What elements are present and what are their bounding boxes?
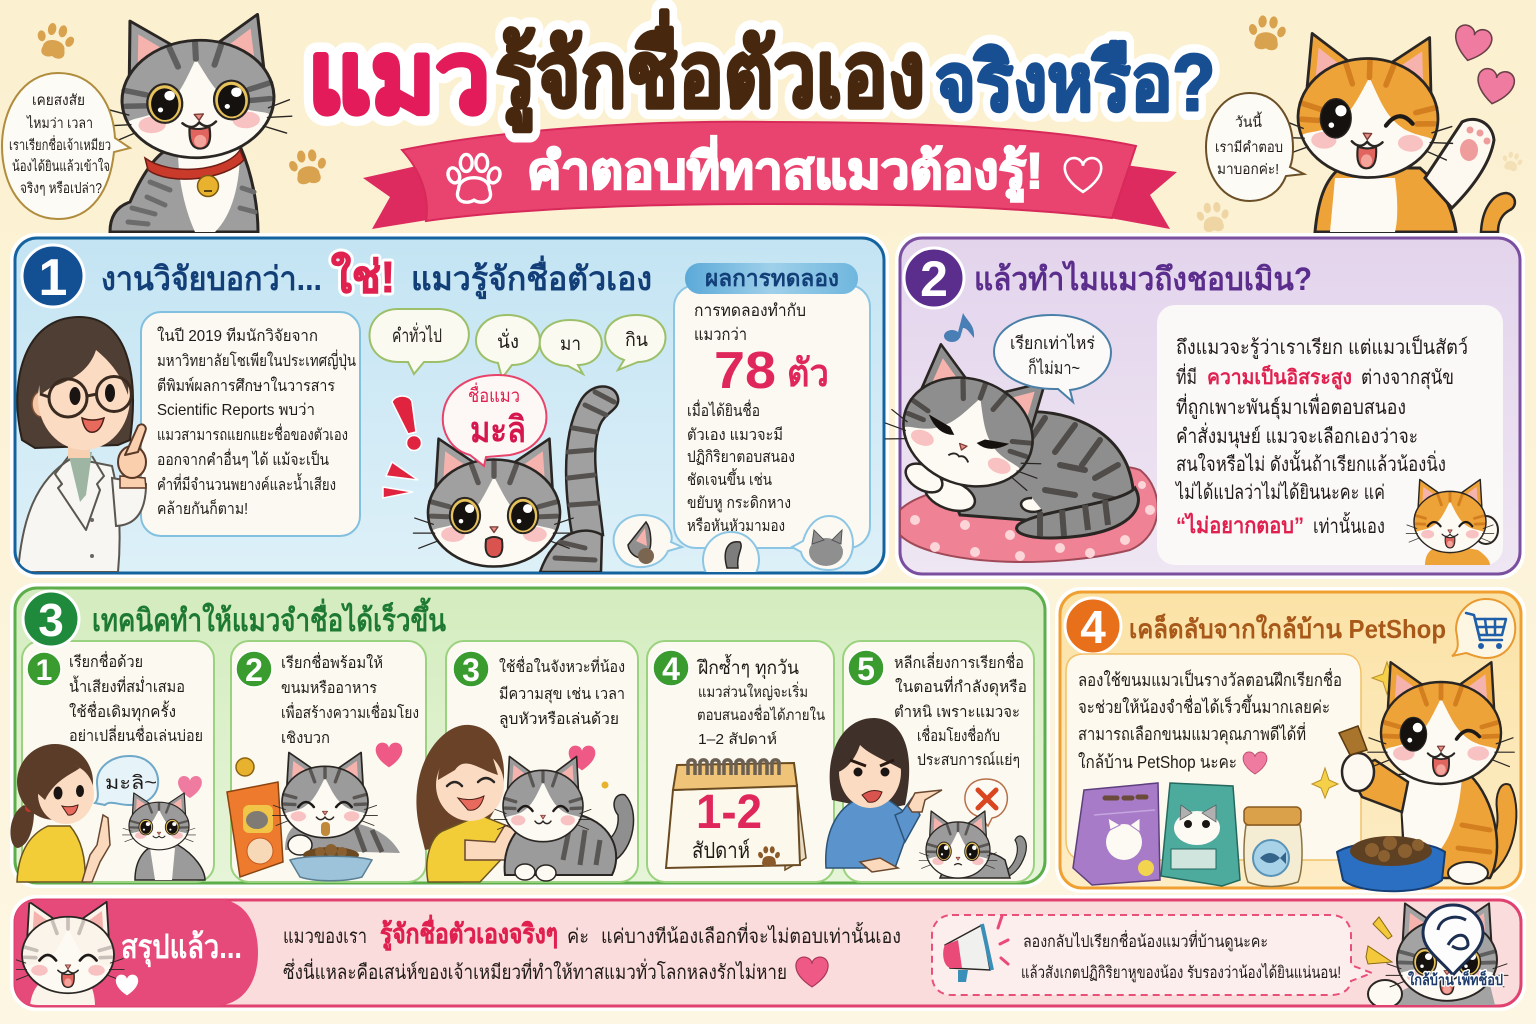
technique 4 card: 1–2 สัปดาห์ <box>698 731 777 748</box>
decorative paw prints <box>32 14 1525 233</box>
cat eating <box>273 752 400 855</box>
summary text: ซึ่งนี่แหละคือเสน่ห์ของเจ้าเหมียวที่ทำให้ทาสแมวทั่วโลกหลงรักไม่หาย <box>283 958 787 984</box>
logo pin: ใกล้บ้าน เพ็ทช็อป <box>1408 970 1503 989</box>
panel 1 heading: แมวรู้จักชื่อตัวเอง <box>411 255 652 300</box>
experiment results card: ชัดเจนขึ้น เช่น <box>687 468 772 489</box>
panel 1: research <box>10 233 889 588</box>
panel 4 number badge: 4 <box>1080 601 1106 653</box>
reaction icons <box>612 514 854 572</box>
technique 2 card <box>227 641 426 882</box>
word bubbles: กิน <box>625 330 648 351</box>
panel 4 number badge <box>1065 598 1121 654</box>
experiment results card: ตัวเอง แมวจะมี <box>687 426 783 444</box>
callout with megaphone: แล้วสังเกตปฏิกิริยาหูของน้อง รับรองว่าน้องได้ยินแน่นอน! <box>1021 963 1341 983</box>
technique 3 card: 3 <box>462 652 480 688</box>
panel 2 body text card: ต่างจากสุนัข <box>1361 367 1454 390</box>
icon: shopping cart bubble <box>1452 599 1515 658</box>
panel 1 heading: งานวิจัยบอกว่า... <box>101 260 322 297</box>
panel 2 body text card: “ไม่อยากตอบ” <box>1176 512 1304 538</box>
speech bubble: sleepy cat: ก็ไม่มา~ <box>1028 357 1080 378</box>
panel 4 body text card <box>1066 654 1361 860</box>
speech bubble: sleepy cat <box>994 315 1111 402</box>
speech bubble: right cat <box>1206 93 1304 201</box>
food bowl <box>290 844 372 881</box>
technique 5 card: ตำหนิ เพราะแมวจะ <box>894 704 1020 721</box>
surprised cat <box>413 439 602 572</box>
logo pin <box>1408 905 1503 989</box>
technique 4 card <box>647 641 834 882</box>
panel 2 heading: แล้วทำไมแมวถึงชอบเมิน? <box>974 260 1312 297</box>
panel 1 body text card: ตีพิมพ์ผลการศึกษาในวารสาร <box>157 376 335 395</box>
title: จริงหรือ? <box>935 38 1215 127</box>
technique 1 card: น้ำเสียงที่สม่ำเสมอ <box>69 675 185 696</box>
technique 5 card <box>826 641 1034 882</box>
cat name bubble <box>443 375 546 466</box>
panel 1 body text card: Scientific Reports พบว่า <box>157 402 315 419</box>
technique 2 card: ขนมหรืออาหาร <box>281 679 377 697</box>
title: แมว <box>308 22 490 134</box>
technique 4 card: ตอบสนองชื่อได้ภายใน <box>697 704 825 724</box>
speech bubble: sleepy cat: เรียกเท่าไหร่ <box>1010 333 1095 353</box>
grey cat bottom right <box>1368 903 1508 1008</box>
banner ribbon <box>363 122 1177 229</box>
panel 2 body text card: ความเป็นอิสระสูง <box>1207 364 1352 391</box>
coin and heart <box>236 743 402 776</box>
panel 4 body text card: จะช่วยให้น้องจำชื่อได้เร็วขึ้นมากเลยค่ะ <box>1078 694 1330 717</box>
panel 1 body text card: มหาวิทยาลัยโชเพียในประเทศญี่ปุ่น <box>157 349 356 371</box>
technique 5 card: หลีกเลี่ยงการเรียกชื่อ <box>894 652 1024 672</box>
panel 4 body text card: ใกล้บ้าน PetShop นะคะ <box>1078 752 1237 772</box>
title <box>308 9 1215 134</box>
panel 3: techniques <box>10 583 1050 888</box>
experiment results card: แมวกว่า <box>694 325 747 344</box>
technique 3 card: ลูบหัวหรือเล่นด้วย <box>499 710 619 729</box>
panel 3 number badge: 3 <box>38 594 64 646</box>
panel 1 heading: ใช่! <box>331 251 395 302</box>
experiment results card: การทดลองทำกับ <box>694 301 806 320</box>
small cat with heart <box>122 776 205 880</box>
hearts near orange cat <box>1450 23 1516 107</box>
technique 2 card: เรียกชื่อพร้อมให้ <box>281 652 383 672</box>
logo pin: ใกล้บ้าน เพ็ทช็อป <box>1408 970 1503 989</box>
blue food bowl <box>1337 836 1445 891</box>
panel 2 number badge <box>904 248 964 308</box>
panel 2: why ignore <box>874 233 1525 579</box>
panel 4 body text card: สามารถเลือกขนมแมวคุณภาพดีได้ที่ <box>1078 722 1306 745</box>
experiment results card: ตัว <box>787 353 829 395</box>
panel 1 number badge: 1 <box>39 249 67 307</box>
word bubbles: นั่ง <box>497 328 519 353</box>
summary label tab <box>12 900 258 1006</box>
title: รู้จักชื่อตัวเอง <box>495 9 925 132</box>
yellow attention rays <box>1366 917 1392 964</box>
panel 2 body text card: ไม่ได้แปลว่าไม่ได้ยินนะคะ แค่ <box>1174 481 1385 504</box>
icon: megaphone <box>943 916 1008 982</box>
technique 3 card: ใช้ชื่อในจังหวะที่น้อง <box>499 656 625 676</box>
panel 1 body text card: ออกจากคำอื่นๆ ได้ แม้จะเป็น <box>157 448 329 469</box>
technique 1 card: ใช้ชื่อเดิมทุกครั้ง <box>69 700 176 722</box>
technique 1 card: เรียกชื่อด้วย <box>69 651 143 671</box>
product: teal treat bag <box>1161 783 1240 886</box>
icon: music note <box>944 313 974 342</box>
summary text: แมวของเรา <box>283 926 367 948</box>
panel 1 body text card: คล้ายกันก็ตาม! <box>157 498 248 518</box>
exclamation mark and rays <box>383 396 422 498</box>
grey cat at top left <box>101 13 294 232</box>
panel 2 body text card: ถึงแมวจะรู้ว่าเราเรียก แต่แมวเป็นสัตว์ <box>1176 334 1468 360</box>
technique 5 card: เชื่อมโยงชื่อกับ <box>917 725 1000 745</box>
panel 2 body text card: ที่มี <box>1176 363 1197 389</box>
panel 2 number badge: 2 <box>920 251 948 307</box>
experiment results card: ผลการทดลอง <box>705 265 839 291</box>
summary text <box>283 914 901 987</box>
callout with megaphone <box>932 915 1372 995</box>
technique 1 card <box>10 641 214 882</box>
panel 2 body text card <box>1157 305 1503 565</box>
technique 5 card: ในตอนที่กำลังดุหรือ <box>895 676 1027 697</box>
technique 1 card: อย่าเปลี่ยนชื่อเล่นบ่อย <box>69 725 203 745</box>
panel 1 heading <box>101 251 652 302</box>
bubble: cat name <box>95 756 158 805</box>
orange treat bag <box>227 782 283 877</box>
speech bubble: left cat: น้องได้ยินแล้วเข้าใจ <box>12 157 110 175</box>
bubble: cat name: มะลิ~ <box>105 773 157 794</box>
banner heart icon <box>1065 158 1101 192</box>
summary text: แค่บางทีน้องเลือกที่จะไม่ตอบเท่านั้นเอง <box>601 922 901 948</box>
technique 3 card <box>416 641 638 882</box>
panel 1 body text card: คำที่มีจำนวนพยางค์และน้ำเสียง <box>157 473 336 494</box>
word bubbles: มา <box>560 334 581 355</box>
panel 1 heading: ใช่! <box>331 251 395 302</box>
technique 4 card: แมวส่วนใหญ่จะเริ่ม <box>698 681 808 701</box>
speech bubble: left cat: เราเรียกชื่อเจ้าเหมียว <box>9 135 111 154</box>
cat tail <box>566 386 618 535</box>
scientist illustration <box>17 317 146 572</box>
speech bubble: right cat: วันนี้ <box>1235 111 1262 131</box>
speech bubble: left cat: ไหมว่า เวลา <box>26 114 93 132</box>
sparkles <box>1312 662 1402 798</box>
speech bubble: left cat: เคยสงสัย <box>32 93 85 109</box>
summary text: รู้จักชื่อตัวเองจริงๆ <box>380 914 558 951</box>
product: treat jar <box>1244 807 1302 886</box>
summary text: ค่ะ <box>567 926 589 948</box>
experiment results card: เมื่อได้ยินชื่อ <box>687 399 760 420</box>
technique 4 card: 4 <box>662 651 680 687</box>
calendar <box>666 760 806 870</box>
orange cat holding treat <box>1339 662 1516 884</box>
panel 4 body text card: ลองใช้ขนมแมวเป็นรางวัลตอนฝึกเรียกชื่อ <box>1078 668 1342 690</box>
panel 3 number badge <box>23 591 79 647</box>
technique 5 card: ประสบการณ์แย่ๆ <box>917 751 1020 769</box>
panel 3 heading: เทคนิคทำให้แมวจำชื่อได้เร็วขึ้น <box>92 597 446 638</box>
technique 2 card: 2 <box>245 652 263 688</box>
girl calling the cat <box>10 744 110 882</box>
panel 2 body text card: สนใจหรือไม่ ดังนั้นถ้าเรียกแล้วน้องนิ่ง <box>1176 450 1446 476</box>
speech bubble: right cat: เรามีคำตอบ <box>1215 139 1283 156</box>
small happy orange cat <box>1406 480 1498 565</box>
technique 2 card: เชิงบวก <box>281 730 330 747</box>
cat name bubble: ชื่อแมว <box>468 382 520 407</box>
calendar: 1-2 <box>696 786 762 839</box>
experiment results card: ปฏิกิริยาตอบสนอง <box>687 449 795 466</box>
panel 1 body text card: แมวสามารถแยกแยะชื่อของตัวเอง <box>157 423 348 444</box>
product: purple treat bag <box>1073 783 1160 885</box>
title: แมว <box>308 22 490 134</box>
panel 1 body text card: ในปี 2019 ทีมนักวิจัยจาก <box>157 326 318 345</box>
title: รู้จักชื่อตัวเอง <box>495 9 925 132</box>
speech bubble: left cat: จริงๆ หรือเปล่า? <box>20 180 102 197</box>
callout text: ลองกลับไปเรียกชื่อน้องแมวที่บ้านดูนะคะ <box>1023 930 1268 952</box>
panel 2 body text card: คำสั่งมนุษย์ แมวจะเลือกเองว่าจะ <box>1176 422 1418 449</box>
panel 1 body text card <box>141 312 360 536</box>
cat name bubble: มะลิ <box>470 409 526 450</box>
orange cat at top right <box>1281 32 1515 232</box>
panel 1 number badge <box>22 245 84 307</box>
summary band <box>10 895 1526 1011</box>
technique 2 card: เพื่อสร้างความเชื่อมโยง <box>281 702 419 722</box>
banner paw icon <box>446 154 502 202</box>
summary label text: สรุปแล้ว... <box>121 928 242 968</box>
scolding woman <box>826 718 942 872</box>
experiment results card: 78 <box>714 342 776 400</box>
banner subtitle: คำตอบที่ทาสแมวต้องรู้! <box>527 136 1043 202</box>
title: จริงหรือ? <box>935 38 1215 127</box>
panel 2 body text card: ที่ถูกเพาะพันธุ์มาเพื่อตอบสนอง <box>1176 393 1406 420</box>
speech bubble: left cat <box>2 73 130 219</box>
technique 5 card: 5 <box>857 651 875 687</box>
experiment results card <box>614 263 870 588</box>
technique 3 card: มีความสุข เช่น เวลา <box>499 686 625 704</box>
X warning bubble <box>965 779 1007 826</box>
technique 4 card: ฝึกซ้ำๆ ทุกวัน <box>696 654 799 680</box>
sleeping cat on cushion <box>874 336 1158 562</box>
white cat mascot <box>12 902 124 1006</box>
cuddling cat <box>494 746 634 881</box>
smiling girl hugging cat <box>416 725 520 882</box>
panel 2 body text card: เท่านั้นเอง <box>1313 512 1385 538</box>
word bubbles: คำทั่วไป <box>392 322 442 347</box>
calendar: สัปดาห์ <box>692 838 750 863</box>
technique 1 card: 1 <box>36 654 52 687</box>
speech bubble: right cat: มาบอกค่ะ! <box>1217 162 1279 178</box>
experiment results card: หรือหันหัวมามอง <box>687 517 785 535</box>
panel 4: petshop tip <box>1055 587 1526 893</box>
worried cat <box>919 811 1026 878</box>
word bubbles <box>370 309 666 378</box>
panel 4 heading: เคล็ดลับจากใกล้บ้าน PetShop <box>1129 613 1446 644</box>
experiment results card: ขยับหู กระดิกหาง <box>687 495 791 513</box>
